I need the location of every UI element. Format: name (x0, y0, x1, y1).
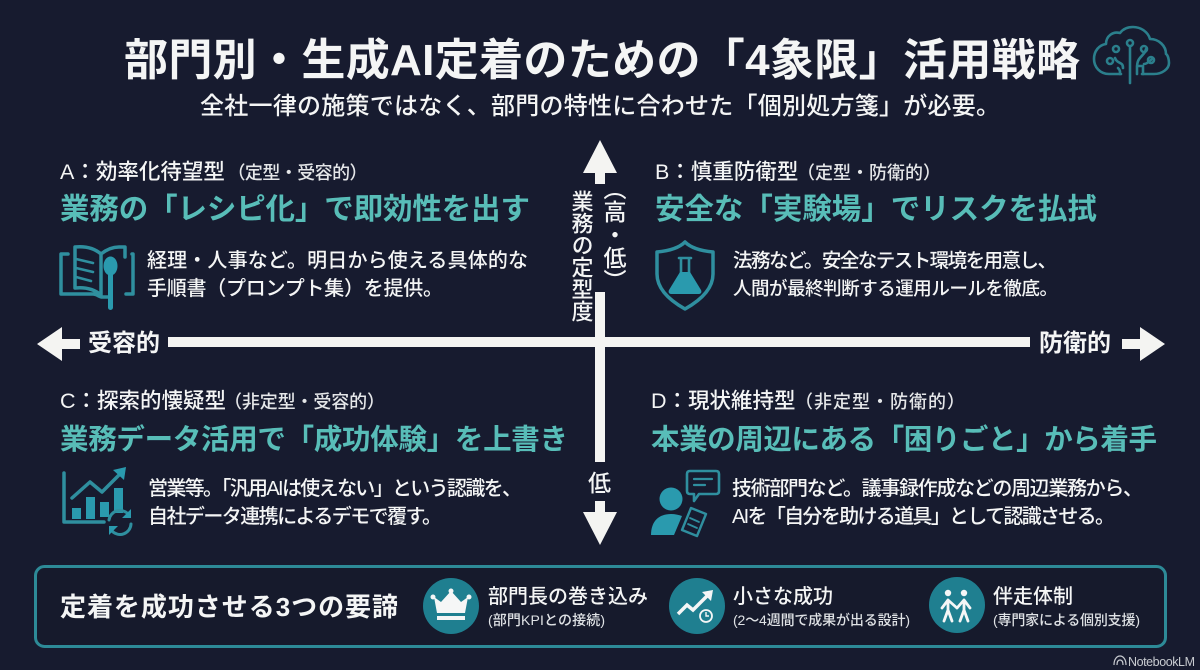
label A: A：効率化待望型 (60, 160, 225, 184)
icon: shield and flask (657, 242, 713, 309)
description A (147, 249, 528, 300)
icon: rising chart with sync (64, 467, 131, 535)
vertical axis (568, 140, 626, 545)
axis label: routine level: 業務の定型度 (568, 190, 594, 322)
heading A: 業務の「レシピ化」で即効性を出す (60, 193, 530, 226)
heading C: 業務データ活用で「成功体験」を上書き (60, 423, 568, 456)
watermark: NotebookLM (1128, 655, 1195, 669)
panel heading: 定着を成功させる3つの要諦 (60, 592, 398, 622)
key 2: (2〜4週間で成果が出る設計) (733, 612, 910, 628)
icon: crown (423, 578, 479, 634)
key 3: 伴走体制 (993, 585, 1073, 608)
heading D: 本業の周辺にある「困りごと」から着手 (651, 423, 1157, 456)
icon: recipe book and spoon (61, 247, 133, 310)
title: 部門別・生成AI定着のための「4象限」活用戦略 (124, 36, 1080, 85)
classification C: （非定型・受容的） (224, 392, 385, 412)
key 1 (488, 585, 648, 628)
heading B: 安全な「実験場」でリスクを払拭 (655, 193, 1097, 226)
description B: 法務など。安全なテスト環境を用意し、 (733, 250, 1057, 272)
label D: D：現状維持型 (651, 389, 796, 413)
axis label: defensive: 防衛的 (1039, 330, 1111, 357)
key 3: (専門家による個別支援) (993, 612, 1140, 628)
right arrow (1122, 327, 1165, 361)
panel: quadrant D (651, 389, 1157, 536)
subtitle: 全社一律の施策ではなく、部門の特性に合わせた「個別処方箋」が必要。 (200, 93, 1000, 120)
label B: B：慎重防衛型 (655, 160, 798, 184)
description C: 営業等。「汎用AIは使えない」という認識を、 (148, 477, 522, 500)
key 3 (993, 585, 1140, 628)
panel: quadrant C (60, 389, 568, 535)
key 1: 部門長の巻き込み (488, 585, 648, 608)
description A: 手順書（プロンプト集）を提供。 (147, 277, 443, 300)
key 2: 小さな成功 (733, 585, 833, 608)
key 1: (部門KPIとの接続) (488, 612, 605, 628)
description A: 経理・人事など。明日から使える具体的な (147, 249, 528, 272)
panel: quadrant A (60, 160, 530, 310)
bottom arrow (583, 501, 617, 545)
icon: AI cloud tree (1094, 27, 1169, 83)
classification A: （定型・受容的） (228, 163, 368, 183)
description D (732, 477, 1143, 528)
description D: 技術部門など。議事録作成などの周辺業務から、 (732, 477, 1143, 500)
icon: two people walking (929, 577, 985, 633)
classification B: （定型・防衛的） (797, 163, 941, 183)
axis label: receptive: 受容的 (88, 330, 160, 357)
horizontal axis (37, 327, 1165, 361)
panel: three keys to success (36, 566, 1166, 646)
icon: person, speech bubble and clipboard (651, 471, 719, 536)
axis label: high and low: （高・低） (600, 177, 626, 292)
top arrow (583, 140, 617, 184)
key 2 (733, 585, 910, 628)
description B (733, 250, 1058, 299)
label C: C：探索的懐疑型 (60, 389, 226, 413)
left arrow (37, 327, 80, 361)
description B: 人間が最終判断する運用ルールを徹底。 (733, 278, 1058, 299)
description C: 自社データ連携によるデモで覆す。 (148, 504, 442, 528)
axis label: low: 低 (588, 470, 611, 496)
panel: quadrant B (655, 160, 1097, 309)
description D: AIを「自分を助ける道具」として認識させる。 (732, 505, 1115, 528)
classification D: （非定型・防衛的） (795, 392, 965, 412)
description C (148, 477, 522, 528)
icon: growth with clock (669, 578, 725, 634)
